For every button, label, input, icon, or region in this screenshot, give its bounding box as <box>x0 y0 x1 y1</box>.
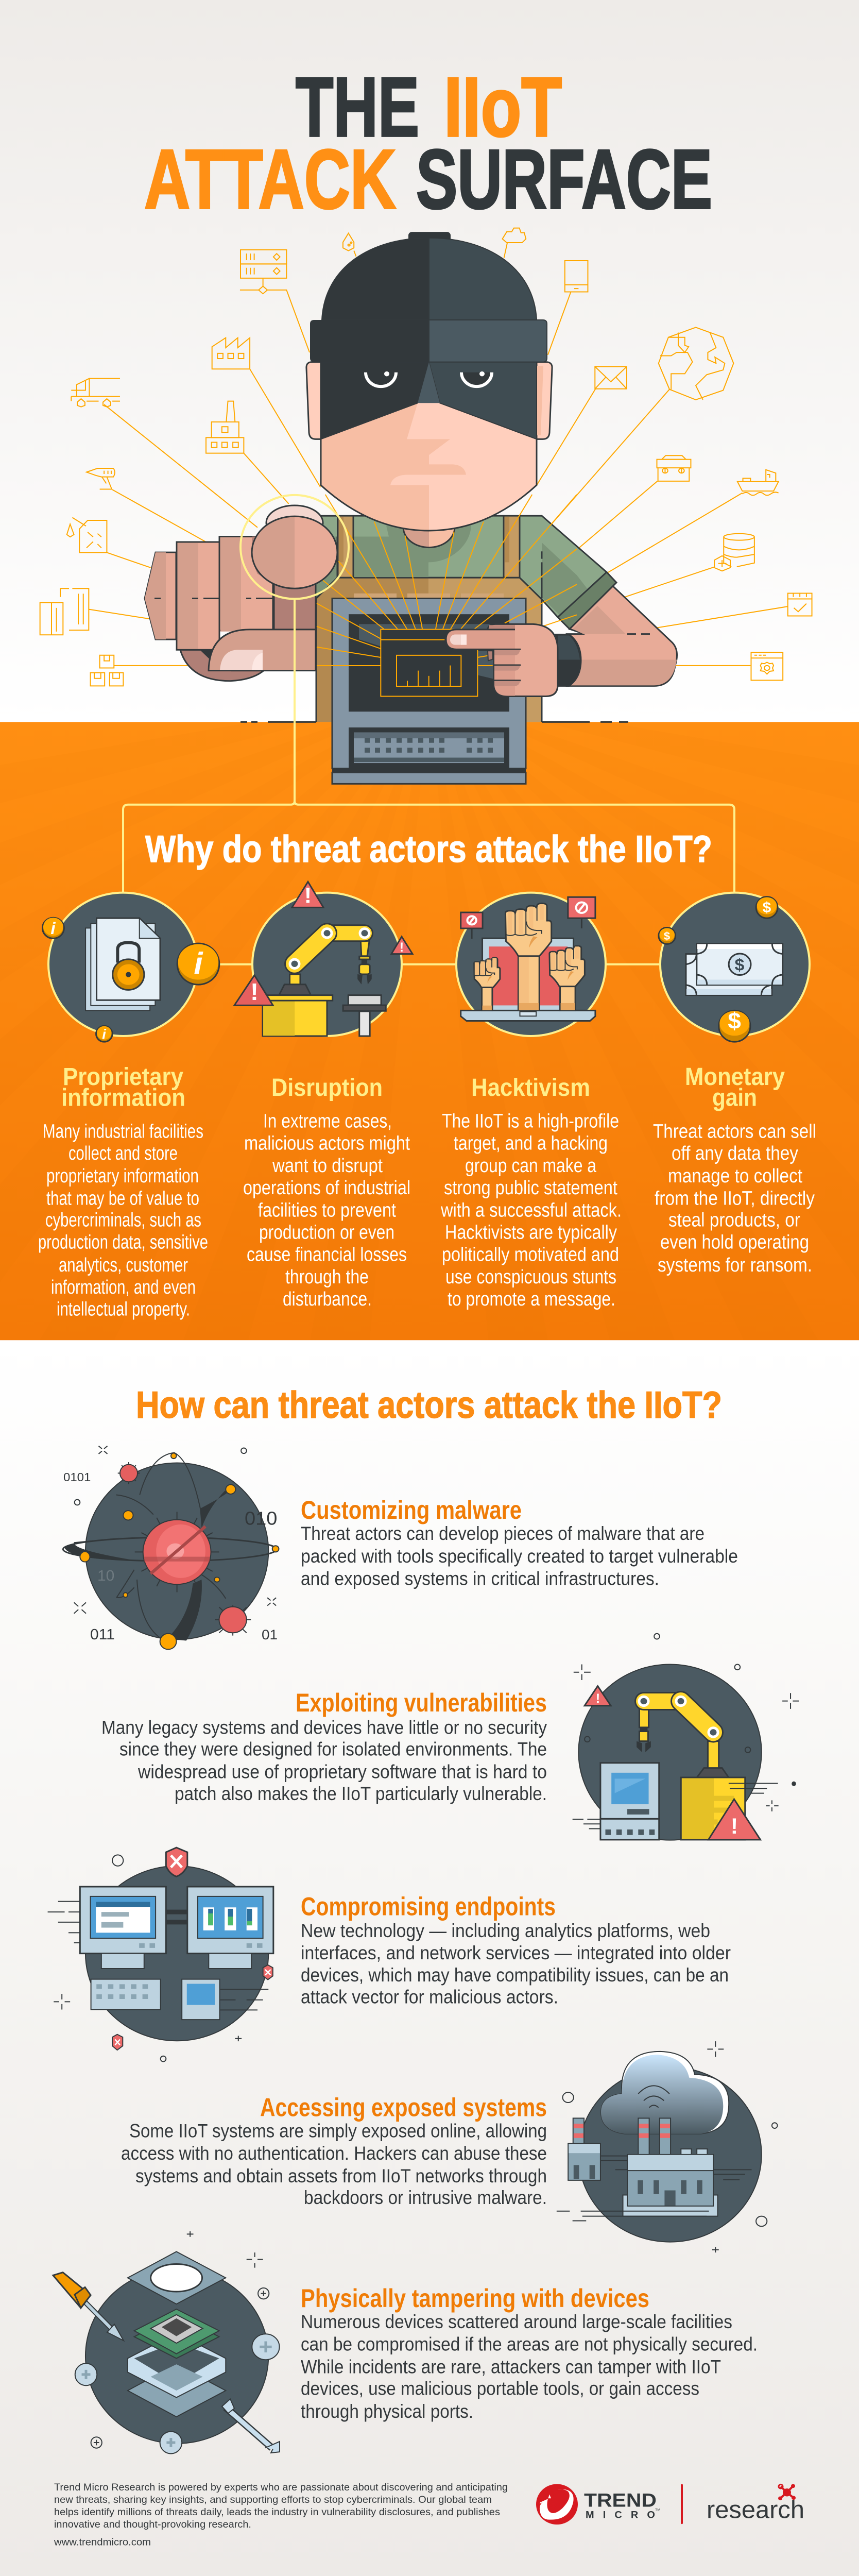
mask <box>321 362 537 439</box>
text block: intellectual property. <box>57 1298 190 1320</box>
text block: can be compromised if the areas are not physically secured. <box>301 2333 758 2355</box>
text block <box>653 1121 816 1276</box>
icon: malware planet: 10 <box>97 1567 114 1584</box>
text block: proprietary information <box>46 1165 199 1187</box>
logo: Trend Micro <box>536 2484 660 2524</box>
icon: locked documents: i <box>194 946 203 980</box>
icon: banknotes and coins: $ <box>664 929 670 942</box>
heading: Disruption <box>271 1074 383 1101</box>
attack rays <box>317 495 577 697</box>
icon: robot arm with monitor: ! <box>731 1815 738 1839</box>
logo: research <box>707 2484 804 2523</box>
text block <box>243 1110 410 1310</box>
text block: devices, use malicious portable tools, or gain access <box>301 2378 699 2399</box>
face <box>321 403 537 531</box>
text block: attack vector for malicious actors. <box>301 1986 558 2008</box>
text block: Numerous devices scattered around large-scale facilities <box>301 2311 732 2333</box>
icon: envelope <box>537 367 627 485</box>
text block: Threat actors can sell <box>653 1121 816 1142</box>
text block: devices, which may have compatibility issues, can be an <box>301 1964 729 1986</box>
text block: want to disrupt <box>272 1155 383 1177</box>
panel: accessing exposed systems <box>121 2041 778 2252</box>
heading: Exploiting vulnerabilities <box>296 1688 547 1717</box>
text block: information, and even <box>51 1277 196 1298</box>
icon: calendar <box>619 593 812 634</box>
background: bottom section <box>0 1340 859 2576</box>
icon: tablet device <box>548 261 588 355</box>
text block: patch also makes the IIoT particularly vulnerable. <box>175 1783 547 1805</box>
text block: strong public statement <box>444 1177 617 1199</box>
text block: that may be of value to <box>46 1188 199 1209</box>
pointing fingertip <box>252 516 337 588</box>
icon: locked documents <box>42 893 219 1042</box>
icon: refinery <box>206 401 289 504</box>
footer text: www.trendmicro.com <box>54 2537 151 2548</box>
icon: locked documents: i <box>50 920 56 938</box>
logo: Trend Micro: MICRO <box>586 2510 655 2521</box>
shirt <box>353 516 504 578</box>
text block <box>38 1121 208 1320</box>
text block: Threat actors can develop pieces of malware that are <box>301 1523 705 1545</box>
panel: physically tampering with devices <box>53 2231 758 2453</box>
text block: politically motivated and <box>442 1244 619 1266</box>
neck <box>403 527 455 548</box>
footer text: innovative and thought-provoking research. <box>54 2519 251 2530</box>
text block: malicious actors might <box>244 1132 410 1155</box>
logo: research: research <box>707 2497 804 2523</box>
icon: locked documents: i <box>102 1026 107 1042</box>
palm block <box>274 584 316 630</box>
panel: disruption <box>234 882 413 1310</box>
palm shadow <box>180 650 264 681</box>
logo divider <box>681 2484 683 2524</box>
upper arm and forearm <box>566 586 677 686</box>
left sleeve <box>312 516 337 598</box>
text block: packed with tools specifically created to target vulnerable <box>301 1546 738 1567</box>
icon: malware planet: 01 <box>262 1627 278 1642</box>
icon: globe <box>551 327 733 525</box>
panel: compromising endpoints <box>48 1848 731 2061</box>
sleeve cuff <box>558 572 616 629</box>
icon: malware planet: 010 <box>245 1507 277 1529</box>
icon: server <box>240 250 310 352</box>
text block: systems for ransom. <box>658 1255 812 1276</box>
title: THE <box>296 60 419 154</box>
text block <box>101 1717 547 1805</box>
text block: use conspicuous stunts <box>445 1266 616 1288</box>
icon: banknotes and coins: $ <box>763 900 771 916</box>
icon: buildings <box>40 588 149 635</box>
icon: robot arm with alerts: ! <box>250 978 259 1005</box>
panel: customizing malware <box>63 1446 738 1649</box>
icons and connector lines around the attacker <box>40 228 812 686</box>
text block: through physical ports. <box>301 2401 473 2422</box>
icon: exploded device with tools <box>53 2231 280 2453</box>
icon: robot arm with alerts: ! <box>304 884 312 908</box>
left fist <box>145 505 337 681</box>
logo: Trend Micro: TM <box>655 2508 660 2512</box>
text block: production or even <box>259 1222 394 1243</box>
connector: yellow focus ring and tree lines <box>123 495 734 964</box>
icon: banknotes and coins: $ <box>735 956 745 974</box>
footer text: new threats, sharing key insights, and supporting efforts to stop cybercriminals. Our global team <box>54 2494 492 2505</box>
footer text: helps identify millions of threats daily, leads the industry in vulnerability disclosures, and publishes <box>54 2506 500 2518</box>
text block: backdoors or intrusive malware. <box>304 2187 547 2209</box>
keyboard keys <box>365 738 493 753</box>
text block: even hold operating <box>660 1231 809 1253</box>
text block: with a successful attack. <box>440 1199 622 1221</box>
attacker illustration <box>145 232 677 784</box>
panel: monetary gain <box>653 893 816 1276</box>
text block: collect and store <box>68 1143 178 1164</box>
text block: access with no authentication. Hackers can abuse these <box>121 2142 547 2164</box>
text block: Many legacy systems and devices have little or no security <box>101 1717 547 1738</box>
title: IIoT <box>444 60 562 154</box>
heading <box>685 1063 785 1111</box>
right sleeve <box>520 516 607 617</box>
text block: disturbance. <box>283 1289 372 1310</box>
wristband <box>551 635 581 686</box>
ears <box>306 362 552 439</box>
text block <box>301 1523 738 1589</box>
text block: The IIoT is a high-profile <box>442 1110 619 1132</box>
icon: robot arm with monitor <box>573 1634 799 1840</box>
icon: malware planet: 0101 <box>63 1470 91 1484</box>
icon: settings window <box>675 652 783 680</box>
thumb <box>209 630 316 671</box>
icon: database <box>613 534 754 601</box>
text block: Hacktivists are typically <box>445 1222 617 1243</box>
text block: production data, sensitive <box>38 1231 208 1253</box>
text block: from the IIoT, directly <box>655 1188 815 1209</box>
heading: Proprietary <box>63 1063 183 1091</box>
text block: In extreme cases, <box>263 1110 392 1132</box>
text block: New technology — including analytics platforms, web <box>301 1920 710 1942</box>
heading: Hacktivism <box>471 1074 590 1101</box>
heading: why: Why do threat actors attack the IIoT? <box>145 828 712 870</box>
icon: robot arm with monitor: ! <box>596 1691 600 1706</box>
icon: cloud and factory <box>557 2041 778 2252</box>
heading: Physically tampering with devices <box>301 2284 649 2313</box>
heading: Compromising endpoints <box>301 1892 556 1921</box>
text block: cause financial losses <box>247 1244 407 1266</box>
icon: malware planet: 011 <box>90 1626 115 1643</box>
fingers <box>145 536 273 650</box>
text block: Many industrial facilities <box>43 1121 203 1142</box>
heading <box>61 1063 185 1111</box>
icon: shop <box>575 455 691 551</box>
eyes <box>366 371 492 386</box>
text block <box>121 2120 547 2209</box>
icon: ship <box>608 470 779 572</box>
text block: systems and obtain assets from IIoT networks through <box>135 2165 547 2187</box>
icon: banknotes and coins <box>659 893 810 1042</box>
dashed ground lines <box>240 721 628 723</box>
text block: analytics, customer <box>59 1255 188 1276</box>
icon: factory <box>212 338 320 487</box>
footer text: Trend Micro Research is powered by experts who are passionate about discovering and anticipating <box>54 2482 508 2493</box>
text block: to promote a message. <box>448 1289 615 1310</box>
panel: hacktivism <box>440 893 622 1310</box>
text block <box>301 1920 731 2008</box>
vest body <box>316 578 542 722</box>
text block: operations of industrial <box>243 1177 410 1199</box>
icon: droplet <box>343 233 356 257</box>
text block <box>440 1110 622 1310</box>
text block: steal products, or <box>668 1209 800 1231</box>
text block: manage to collect <box>668 1165 802 1187</box>
icon: fuel can <box>67 518 151 568</box>
icon: robot arm with alerts <box>234 882 413 1036</box>
text block <box>301 2311 758 2422</box>
icon: boxes <box>91 655 211 686</box>
logo: Trend Micro: TREND <box>584 2489 657 2511</box>
panel: proprietary information <box>38 893 219 1320</box>
heading: information <box>61 1084 185 1111</box>
background: top section <box>0 0 859 722</box>
text block: since they were designed for isolated environments. The <box>119 1738 547 1760</box>
pointing fingertip nail <box>266 505 323 540</box>
title: ATTACK <box>144 132 396 226</box>
vest straps <box>338 516 520 578</box>
pointing right hand <box>446 624 558 697</box>
panel: exploiting vulnerabilities <box>101 1634 799 1840</box>
heading: Customizing malware <box>301 1496 522 1524</box>
laptop <box>332 598 526 784</box>
text block: Some IIoT systems are simply exposed online, allowing <box>129 2120 547 2142</box>
beanie <box>310 232 547 362</box>
heading: Monetary <box>685 1063 785 1091</box>
title: SURFACE <box>416 132 712 226</box>
heading: gain <box>712 1084 757 1111</box>
footer text <box>54 2482 508 2548</box>
text block: interfaces, and network services — integrated into older <box>301 1942 731 1964</box>
icon: malware planet <box>63 1446 279 1649</box>
text block: target, and a hacking <box>454 1132 608 1155</box>
text block: widespread use of proprietary software that is hard to <box>138 1761 547 1783</box>
icon: drill <box>87 468 205 541</box>
icon: banknotes and coins: $ <box>728 1008 741 1033</box>
icon: computers and shields <box>48 1848 273 2061</box>
panel: orange why section background <box>0 692 859 1340</box>
icon: robot arm with alerts: ! <box>400 940 404 955</box>
text block: group can make a <box>465 1155 596 1177</box>
text block: off any data they <box>672 1143 798 1164</box>
heading: Accessing exposed systems <box>260 2093 547 2122</box>
title <box>144 60 712 226</box>
heading: how: How can threat actors attack the IIoT? <box>136 1384 722 1426</box>
text block: and exposed systems in critical infrastructures. <box>301 1568 659 1589</box>
text block: cybercriminals, such as <box>45 1209 201 1231</box>
text block: facilities to prevent <box>258 1199 396 1221</box>
icon: cloud <box>503 228 526 258</box>
icon: truck <box>71 379 257 528</box>
text block: While incidents are rare, attackers can tamper with IIoT <box>301 2356 721 2378</box>
icon: raised fists on a laptop <box>456 893 606 1036</box>
text block: through the <box>285 1266 369 1288</box>
